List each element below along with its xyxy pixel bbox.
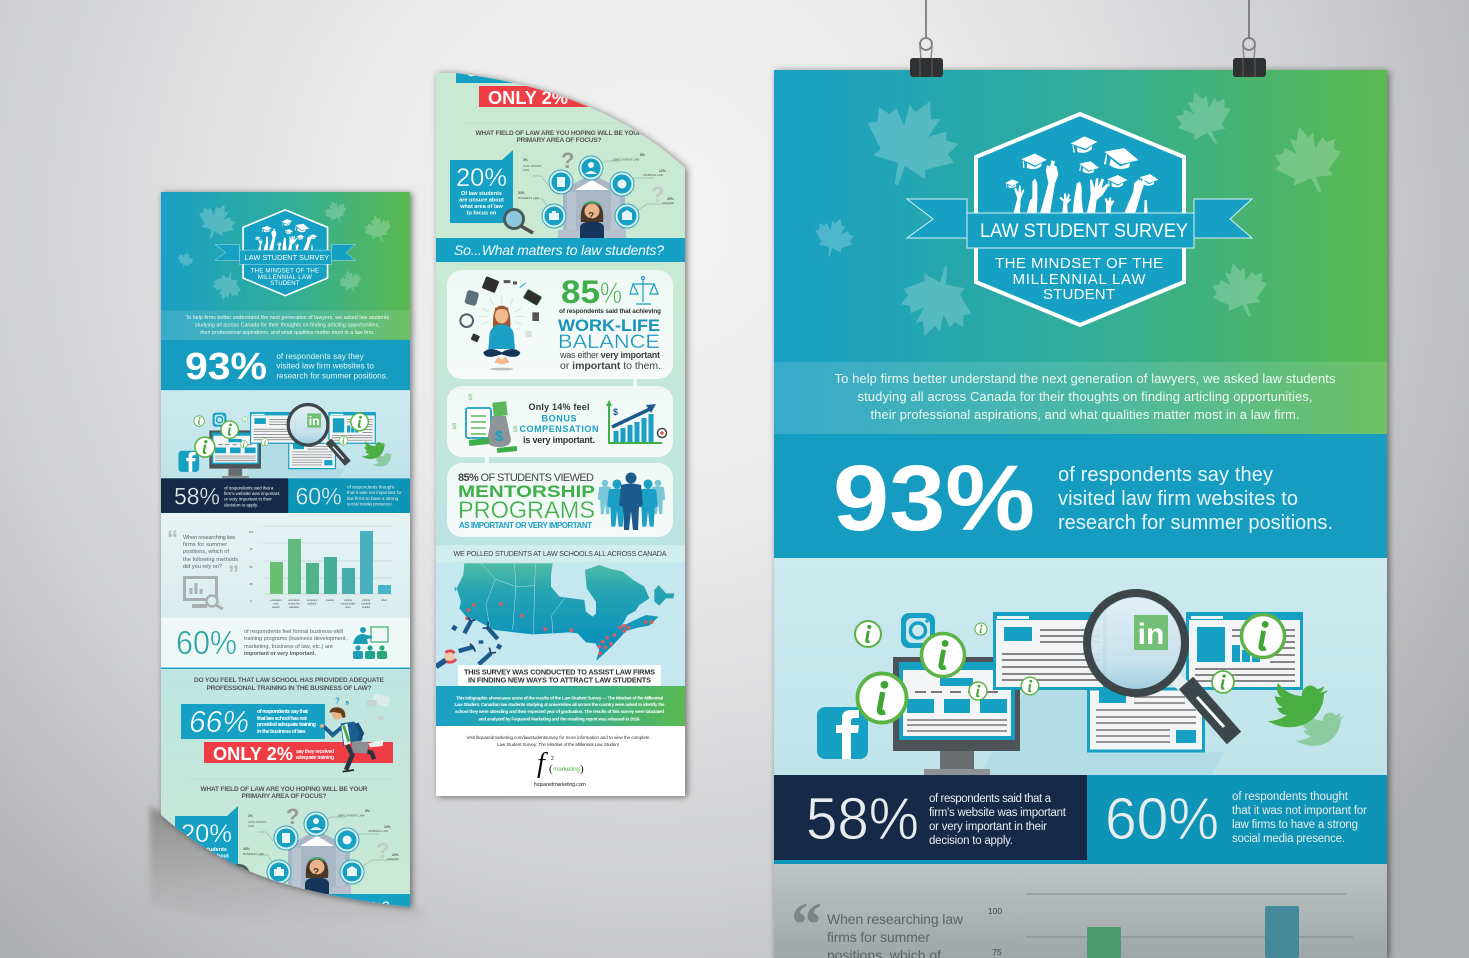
section: business skill training: training programs (business development, xyxy=(244,636,347,642)
field of law heading xyxy=(200,786,368,798)
bar chart: events xyxy=(326,598,335,602)
stat strip: 58 and 60: that it was not important for xyxy=(347,490,402,495)
stat strip: 58 and 60: social media presence. xyxy=(1232,833,1345,845)
stat strip: 58 and 60: decision to apply. xyxy=(224,502,258,507)
chart grid and bars: 100 xyxy=(988,906,1002,916)
quote: the following methods xyxy=(183,557,238,563)
logo: 2 xyxy=(551,756,554,762)
running student illustration: ? xyxy=(335,696,340,705)
field of law labels: UNSURE xyxy=(387,857,399,861)
card: mentorship programs xyxy=(447,463,673,537)
field of law labels: EMPLOYMENT LAW xyxy=(613,158,640,162)
field of law labels: BUSINESS LAW xyxy=(243,852,264,856)
clip left xyxy=(910,0,943,77)
percent sign: % xyxy=(600,277,622,310)
band: polled students xyxy=(436,545,685,562)
section: business skill training: of respondents feel formal business-skill xyxy=(244,629,343,635)
bar chart: education xyxy=(288,598,300,602)
bar chart: 75 xyxy=(250,547,253,551)
bar chart: visiting xyxy=(362,598,371,602)
binder clips and wires xyxy=(910,0,1266,77)
stat fragments: ONLY 2% xyxy=(488,87,568,108)
stat strip: 58 and 60: law firms to have a strong xyxy=(347,496,399,501)
bar chart: company xyxy=(307,599,318,602)
stat: 66 percent: 66% xyxy=(189,704,249,739)
bar chart: 0 xyxy=(250,599,252,603)
field of law labels: ? xyxy=(313,867,319,878)
about band: Law Student. Canadian law students studying at universities all across the country were asked to identify the xyxy=(454,702,665,707)
about band: This infographic showcases some of the results of the Law Student Survey — The Mindset of the Millennial xyxy=(456,696,663,700)
stat: 93 percent: 93% xyxy=(833,446,1035,550)
stat strip: 58 and 60: decision to apply. xyxy=(929,835,1013,847)
stat: 66 percent: of respondents say that xyxy=(257,709,308,715)
about band: school they were attending and their expected year of graduation. The results of this survey were tabulated xyxy=(455,709,664,714)
stat strip: 58 and 60: of respondents thought xyxy=(1232,791,1349,803)
field of law heading: WHAT FIELD OF LAW ARE YOU HOPING WILL BE YOUR xyxy=(476,130,643,137)
linkedin icon: in xyxy=(309,414,320,428)
field of law labels: 34% xyxy=(518,191,525,195)
card: mentorship programs: MENTORSHIP xyxy=(458,482,595,501)
bonus text: COMPENSATION xyxy=(520,424,598,434)
meditating student xyxy=(460,276,542,370)
work-life text: of respondents said that achieving xyxy=(559,308,661,315)
field of law labels: CIVIL RIGHTS xyxy=(248,820,266,824)
stat text: 85 percent: 85 xyxy=(561,274,600,310)
bar chart: websites xyxy=(289,605,300,609)
emblem title: LAW STUDENT SURVEY xyxy=(245,253,329,262)
stat: 93 percent: of respondents say they xyxy=(276,352,365,361)
stat strip: 58 and 60: or very important in their xyxy=(224,497,272,502)
stat strip: 58 and 60: 60% xyxy=(1105,786,1219,852)
section: what matters cards xyxy=(436,262,685,545)
banner: what matters xyxy=(326,894,410,907)
stat: 20 percent: to focus on xyxy=(192,866,222,872)
stat: 20 percent: Of law students xyxy=(461,191,502,197)
poster: second long panel xyxy=(436,48,685,796)
stat: 20 percent: are unsure about xyxy=(184,854,229,860)
running student illustration: s xyxy=(345,700,349,707)
logo: f xyxy=(537,748,548,779)
logo: marketing xyxy=(553,766,580,773)
field of law labels xyxy=(243,808,399,874)
field of law labels: ? xyxy=(651,182,664,207)
work-life text: BALANCE xyxy=(558,332,660,353)
question heading: PROFESSIONAL TRAINING IN THE BUSINESS OF LAW? xyxy=(206,685,372,692)
map of canada xyxy=(454,563,674,661)
bar chart: sites xyxy=(345,605,351,609)
intro text: studying all across Canada for their thoughts on finding articling opportunities, xyxy=(195,322,380,328)
work-life text: was either very important xyxy=(559,350,660,360)
footer: fsquaredmarketing.com xyxy=(534,782,586,788)
section: business skill training: 60% xyxy=(176,624,237,661)
stat strip: 58 and 60 xyxy=(161,478,410,515)
stat: 93 percent xyxy=(186,352,388,380)
stat strip: 58 and 60: firm's website was important xyxy=(224,491,280,496)
stat: 20 percent xyxy=(457,168,506,214)
stat fragments: 66% xyxy=(464,48,524,83)
field of law labels: 20% xyxy=(667,197,674,201)
callout: survey purpose: THIS SURVEY WAS CONDUCTED TO ASSIST LAW FIRMS xyxy=(464,668,655,676)
field of law labels: UNSURE xyxy=(662,201,674,205)
bonus text: Only 14% feel xyxy=(528,402,590,412)
stat: 20 percent: 20% xyxy=(456,164,507,192)
logo: ( xyxy=(549,763,553,775)
stat strip: 58 and 60: of respondents said that a xyxy=(929,793,1052,805)
growth chart xyxy=(606,400,666,443)
stat: 93 percent: visited law firm websites to xyxy=(276,362,374,371)
card: mentorship programs: AS IMPORTANT OR VERY IMPORTANT xyxy=(459,521,592,530)
bar chart: search xyxy=(272,605,280,609)
quote: firms for summer xyxy=(183,542,227,548)
bar chart: web xyxy=(274,602,279,606)
work-life text xyxy=(558,308,661,372)
clip right xyxy=(1233,0,1266,77)
section: business skill training: marketing, business of law, etc.) are xyxy=(244,644,333,650)
question heading xyxy=(194,678,384,690)
stat strip: 58 and 60: 60% xyxy=(295,483,342,510)
emblem title xyxy=(980,221,1188,303)
field of law labels: 20% xyxy=(392,853,399,857)
stat strip: 58 and 60: law firms to have a strong xyxy=(1232,819,1358,831)
footer xyxy=(436,726,685,796)
field of law labels: LAW xyxy=(248,824,254,828)
intro text xyxy=(186,315,389,336)
icon: teacher xyxy=(353,627,388,659)
field of law labels: 8% xyxy=(640,153,645,157)
card: bonus compensation xyxy=(447,386,673,457)
logo: ) xyxy=(580,763,584,775)
bar chart: visiting xyxy=(344,598,353,602)
banner: what matters: So...What matters to law students? xyxy=(179,898,389,914)
stat strip: 58 and 60: social media presence. xyxy=(347,502,393,507)
field of law labels: EMPLOYMENT LAW xyxy=(338,814,365,818)
stat strip: 58 and 60: 58% xyxy=(806,786,919,852)
work-life text: WORK-LIFE xyxy=(558,316,660,335)
poster: first long panel xyxy=(161,192,410,918)
question heading: DO YOU FEEL THAT LAW SCHOOL HAS PROVIDED ADEQUATE xyxy=(194,677,385,684)
emblem title: THE MINDSET OF THE xyxy=(995,255,1163,272)
stat strip: 58 and 60: firm's website was important xyxy=(929,807,1067,819)
field of law labels: 12% xyxy=(659,169,666,173)
stat: only 2 percent: ONLY 2% xyxy=(213,743,293,764)
field of law labels: LAW xyxy=(523,168,529,172)
stat: 93 percent: research for summer positions. xyxy=(276,371,388,380)
stat: only 2 percent: say they received xyxy=(296,749,334,755)
banner: what matters xyxy=(436,238,685,262)
intro text: To help firms better understand the next generation of lawyers, we asked law students xyxy=(834,371,1336,386)
stat: 66 percent: that law school has not xyxy=(257,716,307,722)
section: research methods chart xyxy=(774,864,1387,958)
field of law heading xyxy=(476,130,642,142)
bar chart: other xyxy=(381,598,387,602)
quote: When researching law xyxy=(183,535,236,541)
intro text: studying all across Canada for their thoughts on finding articling opportunities, xyxy=(858,389,1312,404)
stat strip: 58 and 60: that it was not important for xyxy=(1232,805,1367,817)
emblem title: MILLENNIAL LAW xyxy=(258,274,312,281)
stat: 93 percent: research for summer positions. xyxy=(1058,512,1333,534)
bar chart: 25 xyxy=(250,582,253,586)
icon: chart search xyxy=(184,578,223,609)
field of law labels xyxy=(518,152,674,218)
stat fragments xyxy=(468,74,568,104)
bar chart: 50 xyxy=(250,565,253,569)
quote: “ xyxy=(167,526,178,551)
bar chart: of law firm xyxy=(288,602,300,606)
field of law section xyxy=(450,73,674,238)
field of law labels: 12% xyxy=(384,825,391,829)
field of law heading: PRIMARY AREA OF FOCUS? xyxy=(242,793,327,800)
bonus text xyxy=(520,402,598,445)
bar chart: social media xyxy=(341,602,356,606)
icon: scales xyxy=(630,276,658,304)
quote: firms for summer xyxy=(827,929,930,945)
stat: 20 percent xyxy=(182,824,232,858)
callout: survey purpose xyxy=(458,665,661,688)
money illustration: $ xyxy=(452,422,457,431)
bonus text: is very important. xyxy=(523,435,595,445)
intro text: their professional aspirations, and what qualities matter most in a law firm. xyxy=(200,330,374,336)
magnet and graduates xyxy=(436,618,502,667)
header and website sections xyxy=(161,192,410,515)
money illustration: $ xyxy=(495,428,504,445)
about band xyxy=(436,686,685,726)
field of law labels: 3% xyxy=(248,814,253,818)
mentors icon xyxy=(598,472,665,530)
map section xyxy=(436,562,685,687)
stat: 66 percent: in the business of law. xyxy=(257,729,306,735)
bar chart: profiles xyxy=(362,605,371,609)
about band: and analyzed by Fsquared Marketing and the resulting report was released in 2016. xyxy=(478,716,640,722)
stat strip: 58 and 60: 58% xyxy=(174,483,220,510)
intro text: their professional aspirations, and what qualities matter most in a law firm. xyxy=(870,407,1300,422)
field of law labels: ? xyxy=(588,211,594,222)
stat: 93 percent xyxy=(833,446,1333,550)
field of law labels: 3% xyxy=(523,158,528,162)
callout: survey purpose: IN FINDING NEW WAYS TO ATTRACT LAW STUDENTS xyxy=(468,676,651,684)
poster curl shadow xyxy=(150,806,425,931)
emblem title xyxy=(245,255,329,285)
field of law labels: ? xyxy=(286,804,299,829)
band: polled students: WE POLLED STUDENTS AT LAW SCHOOLS ALL ACROSS CANADA xyxy=(454,549,667,558)
stat: 93 percent: of respondents say they xyxy=(1058,464,1273,486)
stat strip: 58 and 60: or very important in their xyxy=(929,821,1047,833)
chart grid and bars xyxy=(988,894,1353,958)
field of law labels: ? xyxy=(561,148,574,173)
quote xyxy=(791,891,964,958)
field of law labels: CIVIL RIGHTS xyxy=(523,164,541,168)
footer: Visit fsquaredmarketing.com/lawstudentsurvey for more information and to view the complete xyxy=(466,735,650,740)
stat: 20 percent: Of law students xyxy=(186,847,227,853)
work-life text: or important to them. xyxy=(560,360,661,372)
section: business of law training xyxy=(161,669,410,918)
quote: ” xyxy=(228,561,239,586)
field of law heading: WHAT FIELD OF LAW ARE YOU HOPING WILL BE YOUR xyxy=(200,786,368,793)
logo xyxy=(537,748,584,779)
stat strip: 58 and 60: of respondents said that a xyxy=(224,485,274,490)
emblem title: THE MINDSET OF THE xyxy=(251,267,319,274)
chart grid and bars: 75 xyxy=(992,947,1002,957)
bar chart: website xyxy=(308,602,317,606)
linkedin icon: in xyxy=(1138,618,1164,651)
section: business skill training: important or very important. xyxy=(244,651,316,657)
bar chart xyxy=(249,526,392,609)
emblem title: MILLENNIAL LAW xyxy=(1012,271,1146,288)
field of law labels: 8% xyxy=(365,809,370,813)
card: work-life balance xyxy=(447,270,673,379)
quote: “ xyxy=(791,891,822,958)
stat strip: 58 and 60: of respondents thought xyxy=(347,485,395,490)
emblem title: LAW STUDENT SURVEY xyxy=(980,221,1188,242)
quote: did you rely on? xyxy=(183,564,222,570)
running student illustration xyxy=(320,693,390,772)
stat: 66 percent: provided adequate training xyxy=(257,722,316,728)
emblem title: STUDENT xyxy=(1043,286,1115,303)
money illustration: $ xyxy=(468,393,473,402)
growth chart: $ xyxy=(613,407,618,417)
field of law labels: CRIMINAL LAW xyxy=(368,829,388,833)
card: mentorship programs: PROGRAMS xyxy=(458,497,595,524)
stat: 20 percent: what area of law xyxy=(184,860,228,866)
bar chart: education xyxy=(270,598,282,602)
stat: 20 percent: what area of law xyxy=(459,204,503,210)
stat: 20 percent: to focus on xyxy=(467,210,497,216)
intro text: To help firms better understand the next generation of lawyers, we asked law students xyxy=(186,315,389,321)
stat: 66 percent xyxy=(190,709,316,733)
money illustration xyxy=(452,393,518,453)
field of law labels: BUSINESS LAW xyxy=(518,196,539,200)
section: research methods chart xyxy=(161,513,410,618)
stat: only 2 percent: adequate training xyxy=(296,755,334,761)
money illustration: $ xyxy=(513,425,518,434)
footer: Law Student Survey: The Mindset of the Millennial Law Student xyxy=(497,742,620,747)
intro text xyxy=(834,371,1336,422)
stat: only 2 percent xyxy=(214,747,334,760)
emblem title: STUDENT xyxy=(270,280,300,287)
quote xyxy=(168,530,238,572)
bar chart: LinkedIn xyxy=(361,602,371,606)
field of law labels: ? xyxy=(376,838,389,863)
quote: When researching law xyxy=(827,911,964,927)
bonus text: BONUS xyxy=(542,414,576,424)
field of law labels: CRIMINAL LAW xyxy=(643,173,663,177)
stat: 20 percent: 20% xyxy=(181,820,232,848)
field of law heading: PRIMARY AREA OF FOCUS? xyxy=(516,137,602,144)
poster: large hanging panel xyxy=(774,70,1387,958)
stat strip: 58 and 60 xyxy=(774,775,1387,864)
stat: 93 percent: 93% xyxy=(185,346,267,388)
field of law labels: 34% xyxy=(243,847,250,851)
stat: 20 percent: are unsure about xyxy=(459,198,504,204)
card: mentorship programs: 85% OF STUDENTS VIEWED xyxy=(458,472,594,484)
banner: what matters: So...What matters to law students? xyxy=(454,242,664,258)
section: business skill training xyxy=(161,618,410,669)
quote: positions, which of xyxy=(183,549,229,555)
stat: 93 percent: visited law firm websites to xyxy=(1058,488,1298,510)
bar chart: 100 xyxy=(249,530,254,534)
